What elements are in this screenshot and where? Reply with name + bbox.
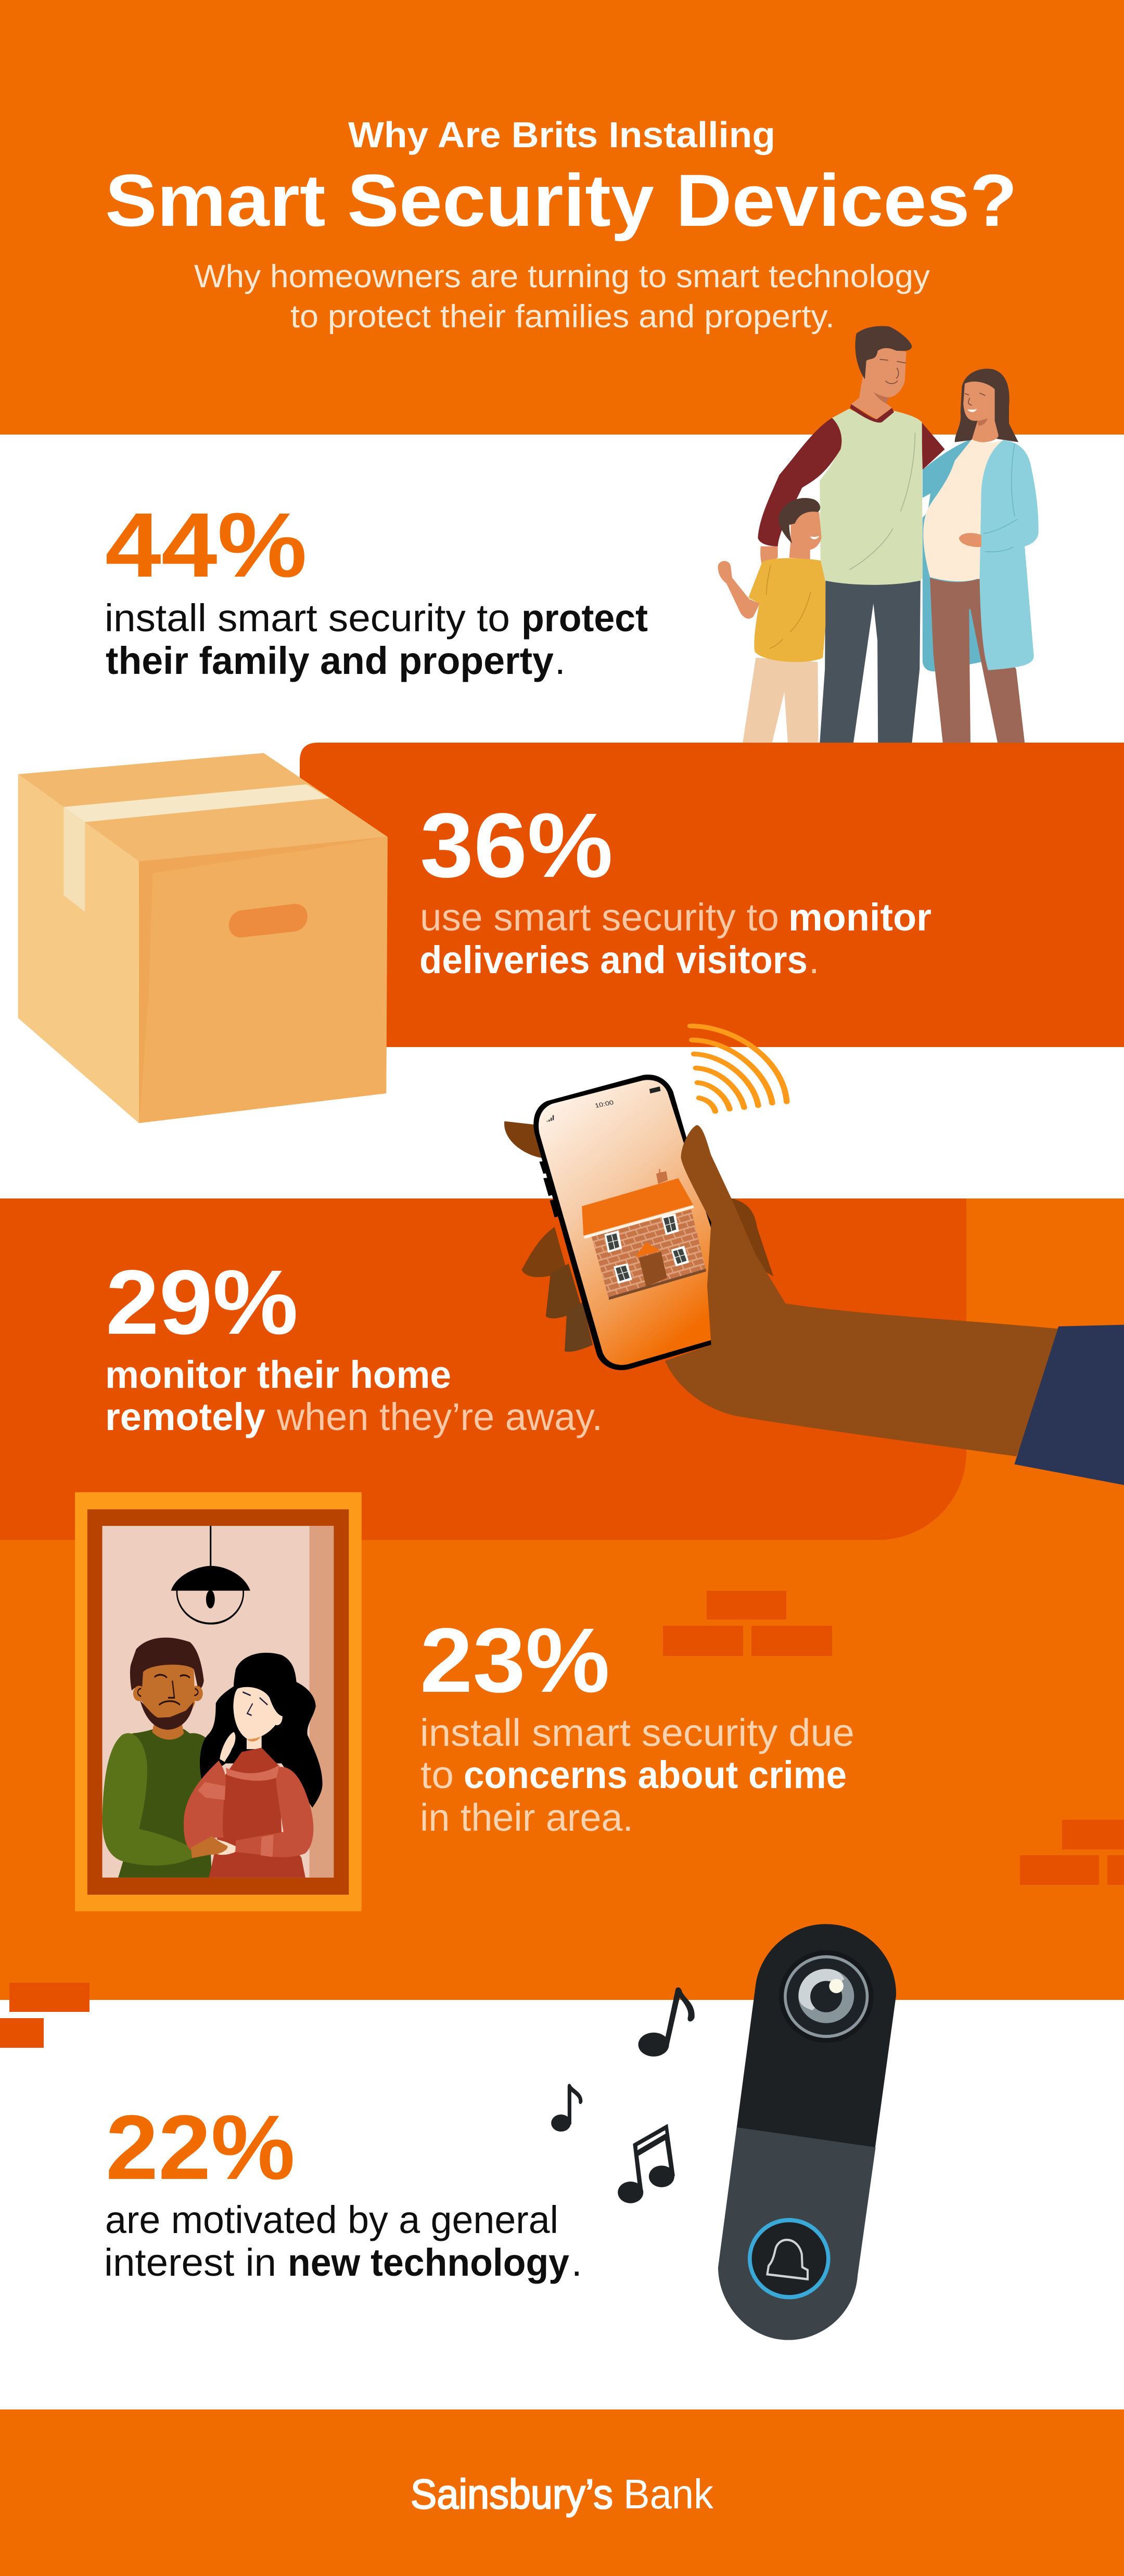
music note small <box>551 2084 582 2132</box>
text: 36% description: monitor <box>788 896 931 939</box>
phone body <box>533 1075 711 1370</box>
chimney <box>656 1169 668 1184</box>
logo: Sainsbury's Bank: Bank <box>623 2471 714 2517</box>
woman trousers <box>930 578 1025 743</box>
window panes <box>606 1216 687 1281</box>
box shadow band <box>139 837 388 1123</box>
man face and neck <box>851 348 906 419</box>
bell button <box>750 2220 828 2297</box>
man trousers <box>820 579 921 743</box>
camera lens <box>779 1950 874 2043</box>
text: 29% description: when they’re away. <box>276 1395 603 1438</box>
man vest <box>820 409 923 585</box>
woman hair <box>955 368 1018 442</box>
signal bars <box>546 1115 554 1121</box>
number: 22%: 22% <box>106 2097 295 2199</box>
woman hand <box>959 533 981 547</box>
phone screen <box>539 1080 711 1365</box>
arm and hand <box>665 1125 1061 1457</box>
text: 22% description: . <box>571 2241 582 2284</box>
text: 36% description: use smart security to <box>420 896 779 939</box>
man arm <box>760 546 778 566</box>
text: 29% description: monitor their home <box>105 1353 451 1396</box>
title: Smart Security Devices? <box>105 159 1017 242</box>
stat: 23% <box>420 1610 854 1839</box>
walls <box>592 1209 706 1298</box>
stat: 29% <box>105 1252 603 1438</box>
doorbell lower panel <box>718 2127 876 2340</box>
held hands <box>191 1836 236 1858</box>
logo: Sainsbury's Bank: Sainsbury’s <box>411 2471 613 2517</box>
boy shirt <box>748 558 825 662</box>
text: 22% description: are motivated by a general <box>105 2198 558 2241</box>
shirt fold lines <box>767 565 811 648</box>
subtitle: Why homeowners are turning to smart technology <box>194 259 930 295</box>
title: Why Are Brits Installing <box>348 114 775 155</box>
man sleeve <box>758 418 841 546</box>
ceiling lamp <box>171 1526 250 1624</box>
decorative bricks: centre <box>663 1591 832 1656</box>
woman face <box>963 381 999 442</box>
box front <box>139 837 388 1123</box>
music note beamed <box>618 2124 675 2203</box>
window glazing bars <box>607 1217 685 1280</box>
text: 36% description: deliveries and visitors <box>419 938 808 981</box>
text: 44% description: install smart security to <box>105 596 510 640</box>
sleeve <box>1014 1325 1124 1485</box>
text: 29% description: remotely <box>105 1395 265 1438</box>
panel: footer <box>0 2409 1124 2576</box>
phone buttons <box>539 1161 560 1217</box>
doorbell body <box>718 1924 896 2340</box>
woman <box>184 1653 323 1878</box>
stat: 36% <box>419 795 931 981</box>
boy face <box>789 511 822 559</box>
status clock: 10:00 <box>594 1099 615 1109</box>
text: 29% description <box>105 1353 603 1438</box>
illustration: couple in window <box>75 1492 362 1911</box>
roof <box>582 1178 693 1235</box>
room wall <box>103 1526 334 1878</box>
man hair <box>855 326 912 379</box>
woman coat front <box>980 440 1039 670</box>
number: 36%: 36% <box>420 795 613 897</box>
text: 23% description: in their area. <box>420 1796 633 1839</box>
music note large <box>638 1987 695 2057</box>
text: 44% description: their family and property <box>106 639 554 682</box>
man <box>103 1638 212 1878</box>
boy smile <box>810 535 819 539</box>
panel: 29% band <box>0 1198 966 1540</box>
stat: 22% <box>104 2097 582 2284</box>
illustration: smart doorbell and notes <box>551 1924 896 2340</box>
text: 23% description <box>420 1711 854 1839</box>
tape side <box>63 807 85 912</box>
text: 44% description: . <box>555 639 566 682</box>
door <box>639 1252 667 1286</box>
house <box>582 1169 706 1300</box>
phone <box>533 1075 711 1370</box>
text: 23% description: to <box>420 1753 454 1796</box>
stat: 44% <box>105 494 648 682</box>
text: 36% description <box>419 896 931 981</box>
text: 44% description <box>105 596 648 682</box>
number: 29%: 29% <box>106 1252 298 1354</box>
decorative bricks: right <box>1020 1820 1124 1885</box>
wifi signal arcs <box>691 1026 787 1111</box>
title <box>105 114 1017 242</box>
box handle <box>229 904 308 938</box>
outer frame <box>75 1492 362 1911</box>
illustration: parcel box <box>18 753 388 1123</box>
text: 22% description <box>104 2198 582 2284</box>
text: 22% description: interest in <box>104 2241 276 2284</box>
decorative bricks: left <box>0 1983 90 2048</box>
house base <box>609 1269 706 1300</box>
illustration: family <box>718 326 1039 743</box>
text: 22% description: new technology <box>288 2241 569 2284</box>
back fingers <box>504 1121 773 1352</box>
boy arm <box>718 561 760 619</box>
illustration: hand holding phone <box>504 1026 1124 1485</box>
battery icon <box>649 1087 660 1093</box>
vest fold lines <box>849 432 915 570</box>
panel: 36% band <box>300 743 1124 1047</box>
eaves <box>583 1205 694 1239</box>
porch <box>635 1242 660 1257</box>
inner frame <box>87 1509 349 1895</box>
woman top <box>923 439 1003 581</box>
tape top <box>63 784 329 822</box>
number: 44%: 44% <box>105 494 307 596</box>
panel: 23% band <box>0 1198 1124 2000</box>
coat fold lines <box>984 443 1017 552</box>
subtitle: to protect their families and property. <box>290 299 835 335</box>
boy hair <box>778 498 820 543</box>
windows <box>604 1214 689 1284</box>
text: 23% description: concerns about crime <box>464 1753 847 1796</box>
man collar <box>850 404 894 423</box>
text: 23% description: install smart security due <box>420 1711 854 1754</box>
woman neck shadow and smile <box>965 393 988 426</box>
box top <box>18 753 388 861</box>
panel: header <box>0 0 1124 435</box>
number: 23%: 23% <box>420 1610 610 1712</box>
man neck shadow and features <box>873 360 906 404</box>
subtitle <box>194 259 930 335</box>
man far sleeve <box>922 422 945 470</box>
box left side <box>18 774 139 1123</box>
text: 44% description: protect <box>521 596 648 640</box>
text: 36% description: . <box>809 938 820 981</box>
room side wall <box>310 1526 334 1878</box>
woman coat back <box>923 439 982 671</box>
boy trousers <box>743 658 819 743</box>
